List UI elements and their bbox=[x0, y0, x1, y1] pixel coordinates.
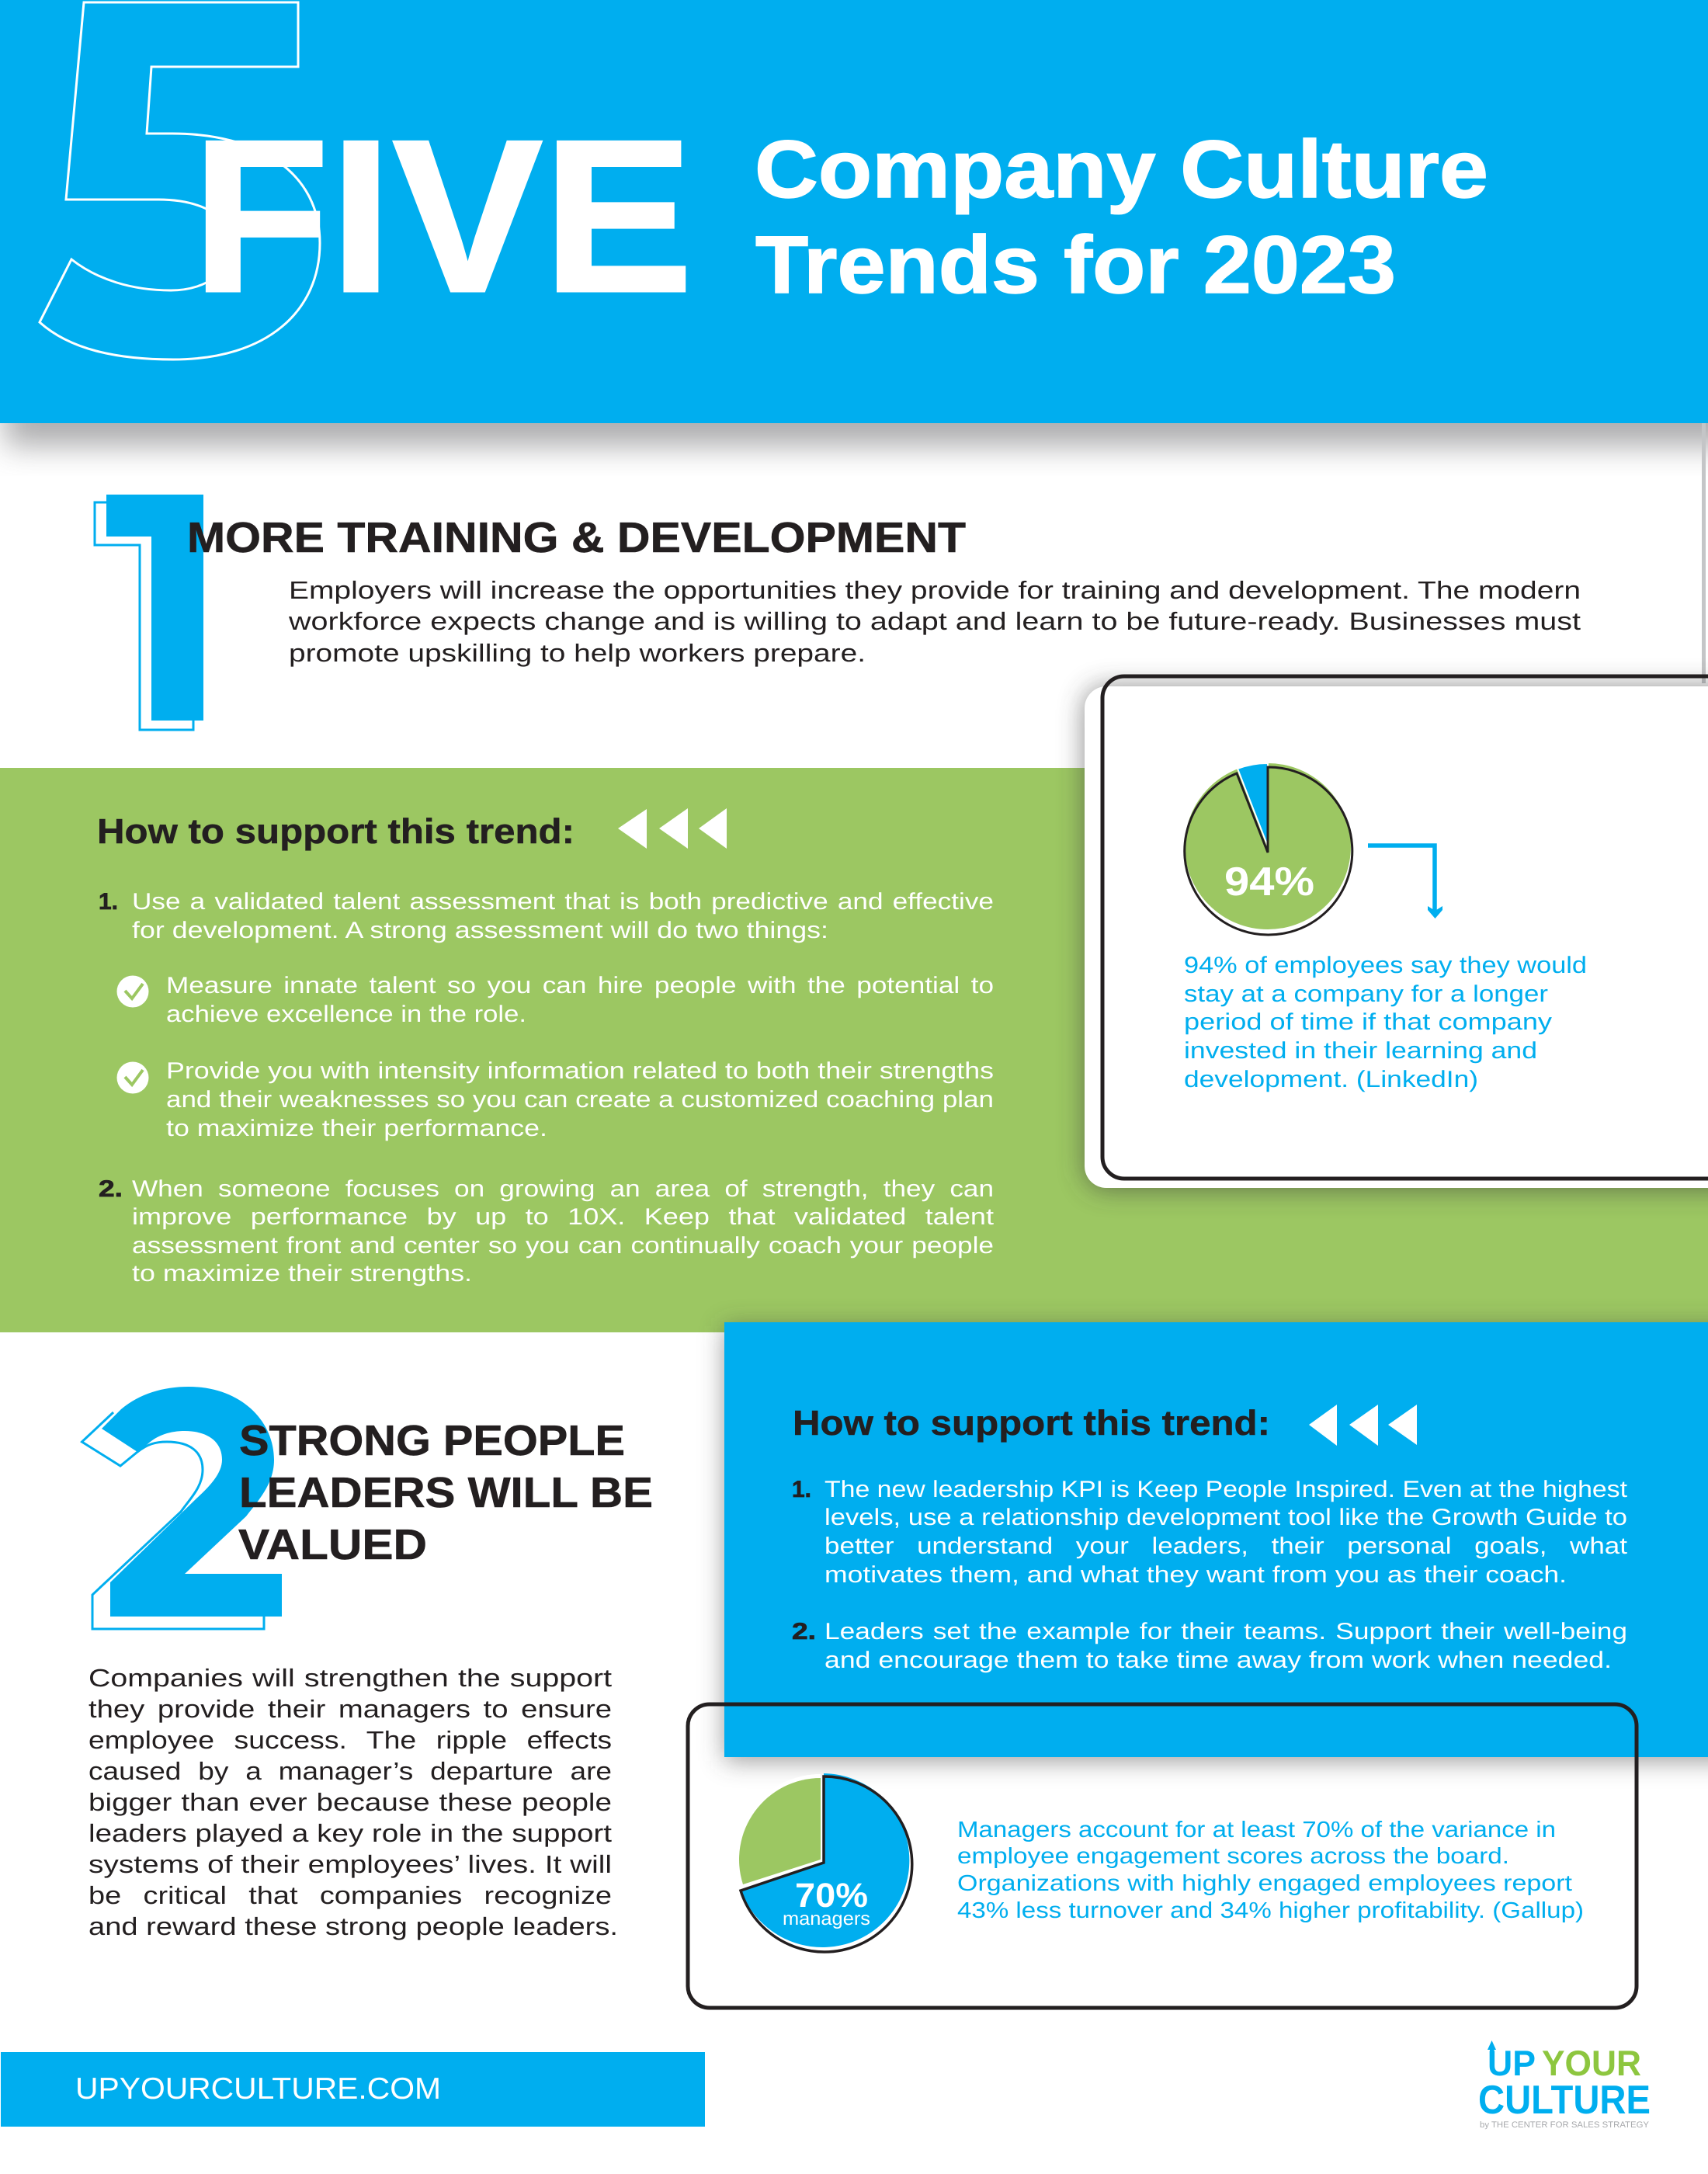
pie chart 94%: 94% bbox=[1224, 860, 1314, 905]
list: trend 1 support steps: improve performance by up to 10X. Keep that validated talent bbox=[132, 1204, 995, 1230]
logo: Up Your Culture: YOUR bbox=[1542, 2043, 1641, 2083]
text block: trend 2 description: they provide their managers to ensure bbox=[89, 1695, 612, 1723]
title word FIVE: FIVE bbox=[192, 96, 693, 338]
list: trend 1 support steps: achieve excellence in the role. bbox=[166, 1002, 526, 1027]
text block: 94% statistic: development. (LinkedIn) bbox=[1184, 1067, 1478, 1092]
text block: 70% statistic: employee engagement scores across the board. bbox=[957, 1844, 1509, 1869]
text block: 70% statistic: Managers account for at least 70% of the variance in bbox=[957, 1818, 1556, 1842]
icon: check 2 bbox=[116, 1062, 149, 1093]
footer URL bar: UPYOURCULTURE.COM bbox=[75, 2072, 441, 2106]
list: trend 2 support steps: 1. bbox=[792, 1477, 811, 1502]
list: trend 1 support steps: assessment front and center so you can continually coach your people bbox=[132, 1233, 994, 1259]
text block: trend 1 description: workforce expects change and is willing to adapt and learn to be future-ready. Businesses must bbox=[288, 607, 1581, 635]
footer URL bar bbox=[1, 2052, 705, 2127]
title: Company Culture Trends for 2023: Company Culture bbox=[755, 124, 1488, 215]
header shadow bbox=[5, 396, 1708, 446]
list: trend 2 support steps: The new leadership KPI is Keep People Inspired. Even at the highest bbox=[824, 1477, 1628, 1502]
text block: 94% statistic bbox=[1184, 953, 1587, 1092]
text block: trend 2 description: employee success. The ripple effects bbox=[89, 1726, 612, 1754]
list: trend 1 support steps: Provide you with intensity information related to both their strengths bbox=[166, 1058, 994, 1084]
panel shadow: statistic card bbox=[1085, 687, 1708, 1189]
list: trend 2 support steps: motivates them, and what they want from you as their coach. bbox=[824, 1562, 1567, 1588]
list: trend 2 support steps: and encourage them to take time away from work when needed. bbox=[824, 1648, 1612, 1673]
list: trend 2 support steps: Leaders set the example for their teams. Support their well-being bbox=[824, 1619, 1627, 1644]
text block: trend 2 description: leaders played a key role in the support bbox=[89, 1819, 612, 1847]
heading: trend 1: MORE TRAINING & DEVELOPMENT bbox=[187, 513, 966, 561]
text block: trend 2 description: and reward these strong people leaders. bbox=[89, 1912, 618, 1940]
panel: green support band bbox=[0, 768, 1708, 1332]
icon: triple arrows bbox=[618, 808, 727, 849]
heading: how to support trend 2: How to support this trend: bbox=[793, 1403, 1270, 1443]
panel: statistic outline 70% bbox=[688, 1704, 1637, 2008]
numeral 2 bbox=[82, 1387, 282, 1629]
list: trend 1 support steps: Use a validated talent assessment that is both predictive and effective bbox=[132, 889, 994, 915]
heading: trend 2 bbox=[238, 1416, 653, 1568]
pie chart 70%: 70% bbox=[795, 1877, 868, 1915]
text block: trend 2 description: be critical that companies recognize bbox=[89, 1881, 612, 1909]
header band bbox=[0, 0, 1708, 423]
list: trend 1 support steps: 1. bbox=[99, 889, 118, 915]
list: trend 2 support steps: better understand your leaders, their personal goals, what bbox=[824, 1533, 1628, 1559]
pie chart 70%: managers bbox=[783, 1908, 870, 1929]
arrow bbox=[1368, 846, 1442, 919]
outlined numeral 5 bbox=[40, 2, 320, 359]
pie chart 70% bbox=[735, 1773, 912, 1952]
list: trend 1 support steps: Measure innate talent so you can hire people with the potential to bbox=[166, 973, 994, 998]
list: trend 2 support steps bbox=[792, 1477, 1628, 1673]
logo: Up Your Culture bbox=[1478, 2040, 1651, 2130]
list: trend 1 support steps: for development. A strong assessment will do two things: bbox=[132, 918, 828, 943]
text block: trend 2 description: systems of their employees’ lives. It will bbox=[89, 1850, 612, 1878]
text block: trend 2 description: Companies will strengthen the support bbox=[89, 1664, 612, 1692]
text block: 70% statistic: Organizations with highly engaged employees report bbox=[957, 1871, 1572, 1896]
right edge shadow line bbox=[1702, 423, 1706, 683]
logo: Up Your Culture: by THE CENTER FOR SALES STRATEGY bbox=[1480, 2120, 1650, 2130]
panel: blue support box bbox=[724, 1322, 1708, 1757]
text block: trend 1 description: promote upskilling to help workers prepare. bbox=[289, 639, 866, 667]
title: Company Culture Trends for 2023: Trends for 2023 bbox=[755, 220, 1396, 311]
text block: trend 1 description: Employers will increase the opportunities they provide for training and development. The modern bbox=[289, 576, 1581, 604]
heading: trend 2: STRONG PEOPLE bbox=[239, 1416, 625, 1464]
text block: 94% statistic: invested in their learning and bbox=[1184, 1038, 1537, 1064]
text block: trend 1 description bbox=[288, 576, 1581, 667]
list: trend 2 support steps: levels, use a relationship development tool like the Growth Guide to bbox=[824, 1505, 1627, 1530]
text block: 70% statistic: 43% less turnover and 34% higher profitability. (Gallup) bbox=[957, 1898, 1584, 1923]
blue panel shadow bbox=[724, 1326, 1708, 1761]
text block: trend 2 description bbox=[89, 1664, 618, 1940]
logo: Up Your Culture: CULTURE bbox=[1478, 2078, 1651, 2123]
icon: up arrow bbox=[1488, 2040, 1496, 2065]
icon: triple arrows bbox=[1309, 1405, 1417, 1446]
list: trend 2 support steps: 2. bbox=[792, 1619, 816, 1644]
numeral 1 bbox=[95, 495, 203, 730]
pie chart 94% bbox=[1185, 763, 1352, 935]
text block: trend 2 description: bigger than ever because these people bbox=[89, 1788, 612, 1816]
text block: trend 2 description: caused by a manager’s departure are bbox=[89, 1757, 612, 1785]
list: trend 1 support steps: 2. bbox=[99, 1176, 123, 1202]
panel: statistic card 94% bbox=[1085, 676, 1708, 1188]
text block: 94% statistic: 94% of employees say they would bbox=[1184, 953, 1587, 978]
logo: Up Your Culture: UP bbox=[1488, 2043, 1536, 2083]
heading: how to support trend 1: How to support this trend: bbox=[97, 811, 575, 851]
text block: 70% statistic bbox=[957, 1818, 1584, 1923]
list: trend 1 support steps bbox=[99, 889, 995, 1287]
list: trend 1 support steps: to maximize their strengths. bbox=[132, 1261, 472, 1287]
list: trend 1 support steps: to maximize their performance. bbox=[166, 1116, 547, 1141]
heading: trend 2: VALUED bbox=[238, 1520, 427, 1568]
heading: trend 2: LEADERS WILL BE bbox=[239, 1468, 653, 1516]
text block: 94% statistic: stay at a company for a longer bbox=[1184, 981, 1548, 1007]
icon: check 1 bbox=[116, 975, 149, 1008]
list: trend 1 support steps: When someone focuses on growing an area of strength, they can bbox=[132, 1176, 994, 1202]
text block: 94% statistic: period of time if that company bbox=[1184, 1009, 1552, 1035]
title: Company Culture Trends for 2023 bbox=[755, 124, 1488, 311]
list: trend 1 support steps: and their weaknesses so you can create a customized coaching plan bbox=[166, 1087, 994, 1113]
